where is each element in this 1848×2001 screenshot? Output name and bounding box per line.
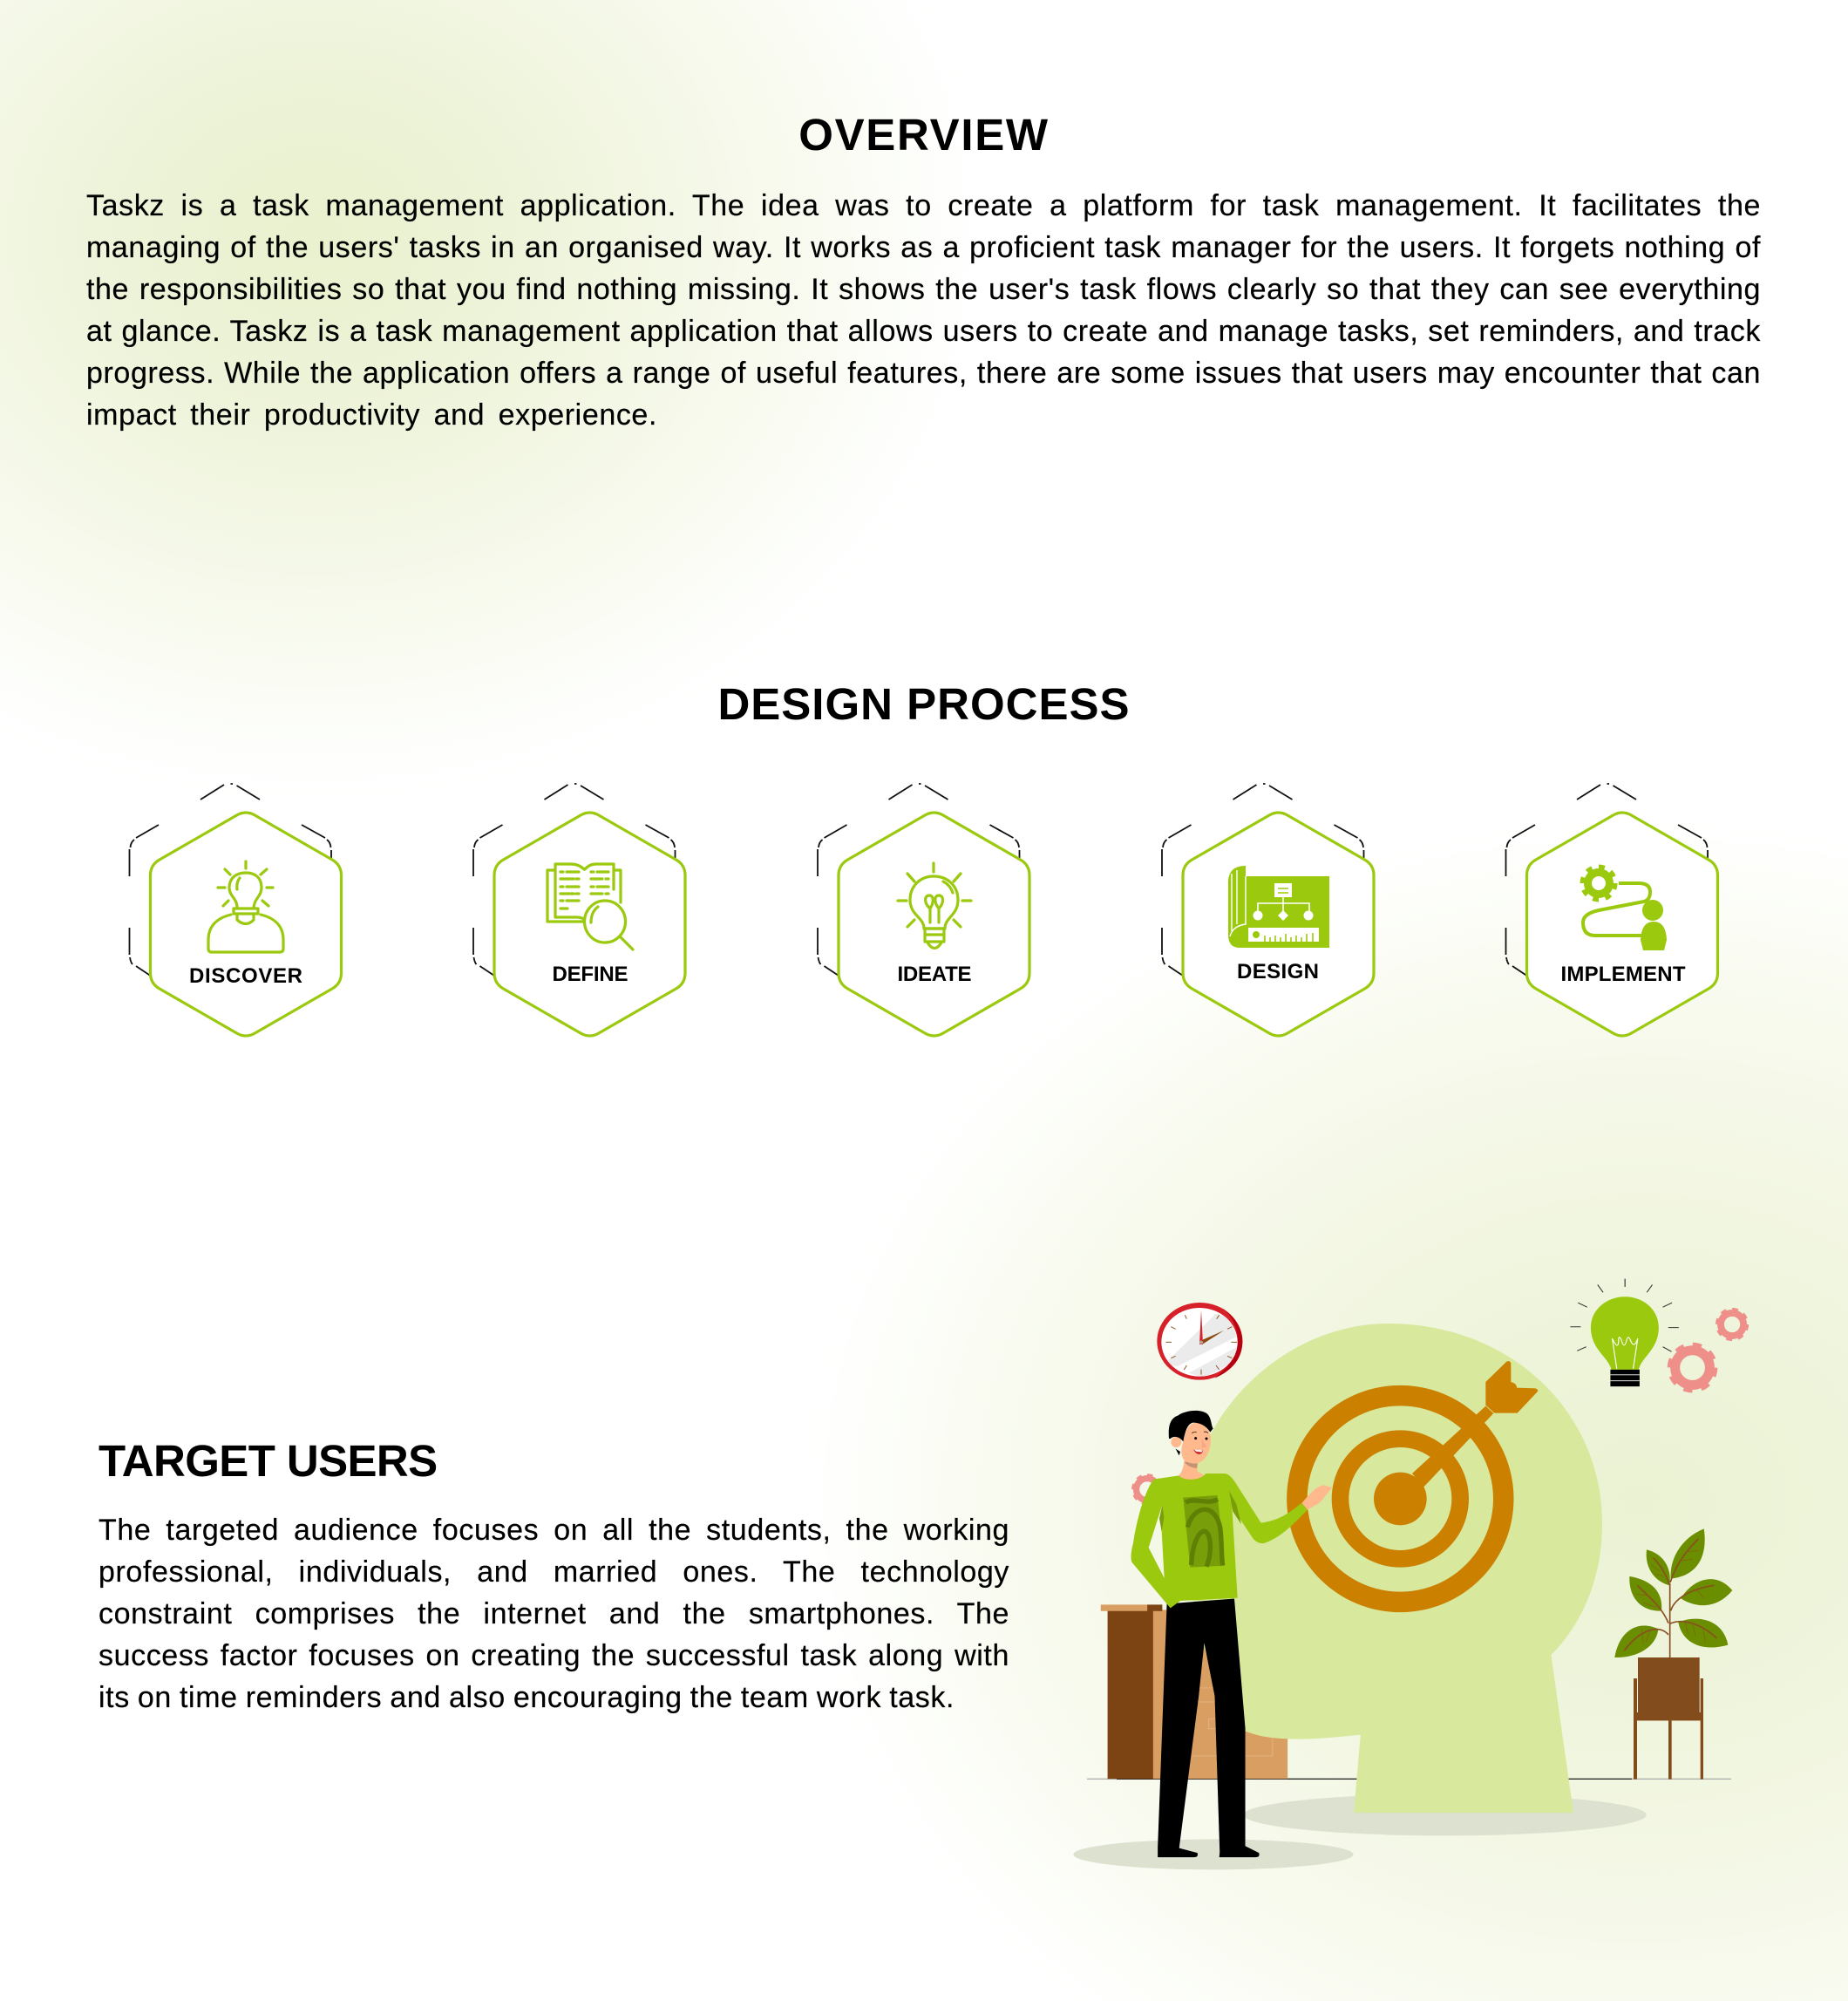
shirt print — [1183, 1495, 1225, 1568]
ear and face — [1171, 1423, 1211, 1464]
text block: target users paragraph: professional, individuals, and married ones. The technology — [99, 1555, 1009, 1589]
illustration: man with target in head — [1074, 1278, 1749, 1869]
heading: target users: TARGET USERS — [99, 1436, 438, 1486]
man upper body — [1131, 1411, 1332, 1608]
man's trousers and shoes — [1158, 1599, 1260, 1857]
hand — [1301, 1485, 1332, 1510]
ground shadows — [1073, 1794, 1647, 1869]
icon: person with light bulb — [208, 861, 283, 952]
label: design: DESIGN — [1237, 960, 1319, 983]
icon: light bulb with filament — [898, 863, 971, 949]
panel: overview — [86, 110, 1761, 431]
ground line — [1087, 1778, 1731, 1780]
heading: overview: OVERVIEW — [798, 110, 1050, 160]
non-uniform artboard mapping — [1073, 1279, 1747, 1869]
step: discover — [129, 784, 342, 1036]
heading: design process: DESIGN PROCESS — [717, 679, 1131, 729]
step: define — [473, 784, 685, 1036]
step: design — [1162, 784, 1374, 1036]
step: ideate — [818, 784, 1029, 1036]
text block: target users paragraph: constraint comprises the internet and the smartphones. The — [99, 1597, 1009, 1630]
text block: target users paragraph: success factor focuses on creating the successful task along with — [99, 1639, 1009, 1672]
sleeve shading — [1159, 1491, 1241, 1532]
panel: design process hexagons — [129, 783, 1719, 1038]
text block: overview paragraph: the responsibilities so that you find nothing missing. It shows the user's task flows clearly so that they can see everything — [86, 272, 1761, 305]
target with arrow — [1287, 1361, 1538, 1612]
panel: target users text — [99, 1436, 1009, 1714]
hair — [1169, 1411, 1213, 1455]
text block: target users paragraph — [99, 1514, 1009, 1714]
label: define: DEFINE — [553, 963, 628, 986]
cardboard box — [1101, 1604, 1287, 1779]
text block: target users paragraph: The targeted audience focuses on all the students, the working — [99, 1514, 1009, 1547]
head silhouette — [1186, 1324, 1602, 1813]
neck and collar skin — [1179, 1460, 1206, 1480]
icon: open book with magnifier — [547, 864, 633, 949]
text block: overview paragraph: at glance. Taskz is a task management application that allows users to create and manage tasks, set reminders, and track — [86, 314, 1761, 347]
text block: overview paragraph: Taskz is a task management application. The idea was to create a platform for task management. It facilitates the — [86, 188, 1761, 221]
label: discover: DISCOVER — [189, 964, 302, 988]
text block: target users paragraph: its on time reminders and also encouraging the team work task. — [99, 1681, 955, 1714]
text block: overview paragraph: progress. While the application offers a range of useful features, there are some issues that users may encounter that can — [86, 356, 1761, 389]
text block: overview paragraph — [86, 188, 1761, 431]
text block: overview paragraph: managing of the users' tasks in an organised way. It works as a proficient task manager for the users. It forgets nothing of — [86, 230, 1761, 263]
gears — [1133, 1310, 1747, 1503]
light bulb — [1570, 1279, 1679, 1386]
text block: overview paragraph: impact their productivity and experience. — [86, 398, 657, 431]
step: implement — [1506, 784, 1717, 1036]
icon: blueprint with flowchart — [1228, 866, 1329, 948]
label: implement: IMPLEMENT — [1560, 963, 1686, 986]
label: ideate: IDEATE — [898, 963, 971, 986]
icon: gear path and person — [1582, 867, 1667, 950]
shirt — [1131, 1474, 1308, 1608]
wall clock — [1157, 1303, 1242, 1380]
plant in pot on stand — [1614, 1528, 1732, 1780]
